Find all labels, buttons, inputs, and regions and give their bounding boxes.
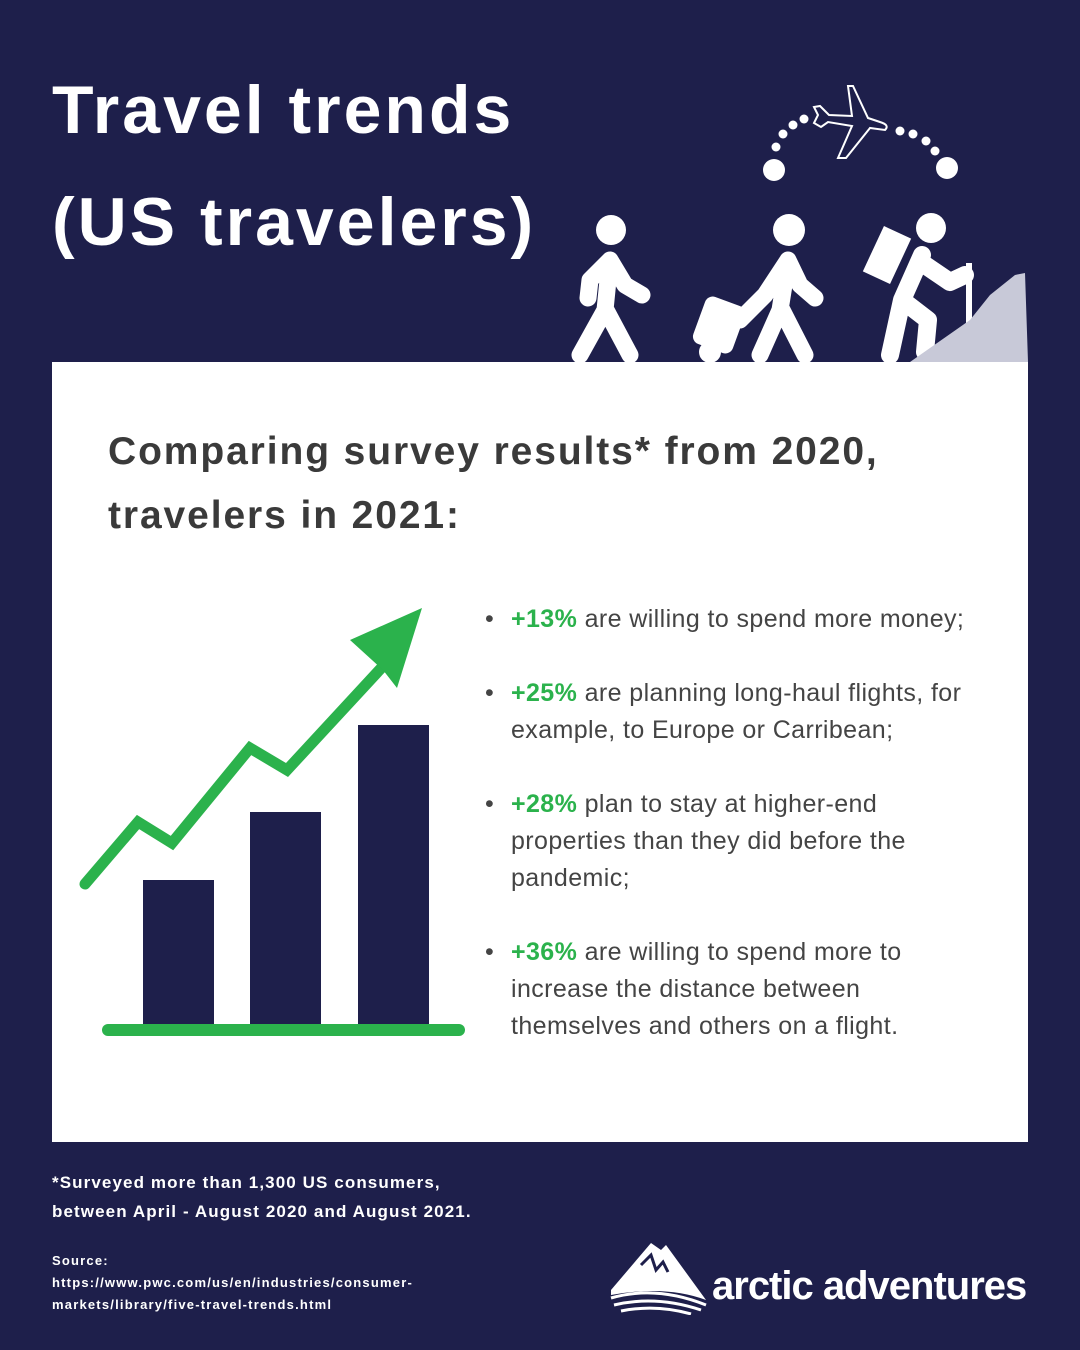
heading: Comparing survey results* from 2020, travelers in 2021: (108, 430, 879, 537)
chart: rising bars with arrow (80, 608, 465, 1036)
bullet list: +36% are willing to spend more to increase the distance between themselves and others on a flight. (511, 938, 902, 1040)
title (52, 72, 536, 260)
source (52, 1253, 413, 1312)
icon: mountain slope (910, 273, 1028, 362)
bullet list: +13% are willing to spend more money; (511, 605, 964, 633)
illustration: travelers and plane (572, 85, 1028, 362)
icon: walking person (580, 213, 972, 363)
footnote: between April - August 2020 and August 2021. (52, 1202, 472, 1221)
logo: arctic adventures (610, 1243, 1026, 1315)
source: https://www.pwc.com/us/en/industries/consumer- (52, 1275, 413, 1290)
source: markets/library/five-travel-trends.html (52, 1297, 332, 1312)
bullet list: +25% are planning long-haul flights, for example, to Europe or Carribean; (511, 679, 961, 744)
icon: plane dotted arc (763, 86, 958, 181)
footnote (52, 1173, 472, 1221)
source: Source: (52, 1253, 109, 1268)
logo: arctic adventures: arctic adventures (712, 1264, 1026, 1308)
title: Travel trends (52, 72, 514, 148)
title: (US travelers) (52, 184, 536, 260)
bullet list: +28% plan to stay at higher-end properties than they did before the pandemic; (511, 790, 906, 892)
footnote: *Surveyed more than 1,300 US consumers, (52, 1173, 441, 1192)
bullet list (486, 605, 964, 1040)
panel: survey results (52, 362, 1028, 1142)
